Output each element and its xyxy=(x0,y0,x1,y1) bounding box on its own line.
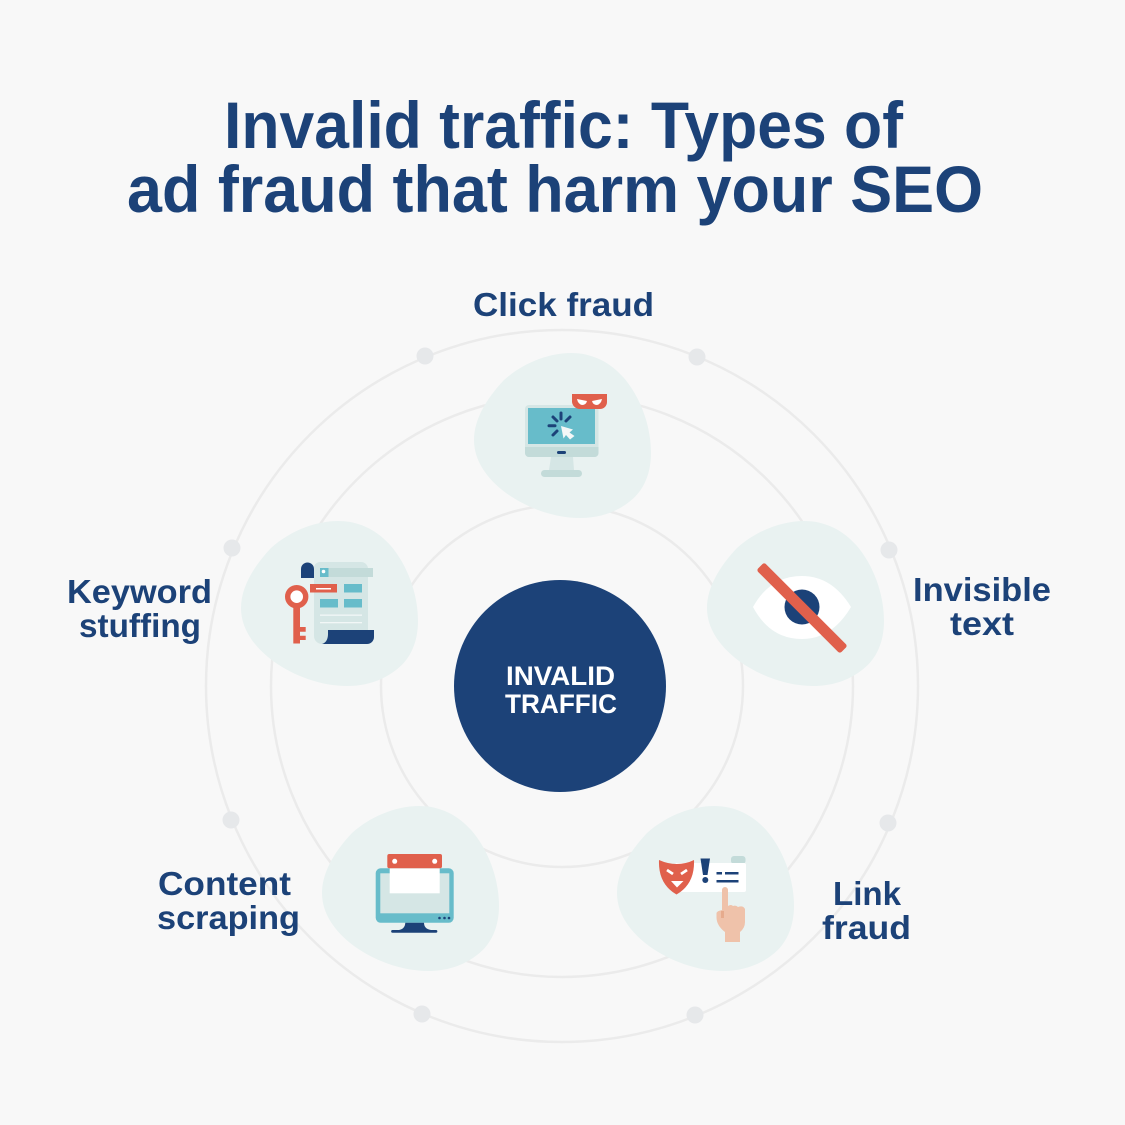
heading: keyword stuffing: stuffing xyxy=(79,607,201,644)
panel: click fraud xyxy=(473,286,654,518)
blob: link fraud xyxy=(617,806,794,971)
title: ad fraud that harm your SEO xyxy=(127,152,983,226)
concentric rings with dots xyxy=(206,330,918,1042)
blob: click fraud xyxy=(474,353,651,518)
blob: content scraping xyxy=(322,806,499,971)
blob: invisible text xyxy=(707,521,884,686)
heading: content scraping: scraping xyxy=(157,899,300,936)
panel: keyword stuffing xyxy=(67,521,418,686)
panel: link fraud xyxy=(617,806,911,971)
icon: mask, alert and pointing hand xyxy=(659,856,746,942)
heading: link fraud: Link xyxy=(833,875,902,912)
heading: invisible text xyxy=(913,571,1051,642)
heading: click fraud: Click fraud xyxy=(473,286,654,323)
centre circle: invalid traffic: TRAFFIC xyxy=(505,689,617,719)
icon: monitor with scraped page xyxy=(376,854,454,933)
icon: monitor with cursor and mask xyxy=(525,394,607,477)
heading: keyword stuffing xyxy=(67,573,212,644)
heading: link fraud: fraud xyxy=(822,909,911,946)
heading: content scraping xyxy=(157,865,300,936)
heading: invisible text: text xyxy=(950,605,1014,642)
heading: content scraping: Content xyxy=(158,865,291,902)
heading: keyword stuffing: Keyword xyxy=(67,573,212,610)
title: Invalid traffic: Types of xyxy=(224,88,904,162)
centre circle: invalid traffic: INVALID xyxy=(506,661,615,691)
blob: keyword stuffing xyxy=(241,521,418,686)
panel: content scraping xyxy=(157,806,499,971)
heading: link fraud xyxy=(822,875,911,946)
icon: document with key xyxy=(288,562,374,644)
title xyxy=(127,88,983,226)
centre circle: invalid traffic xyxy=(454,580,666,792)
icon: crossed-out eye xyxy=(753,562,851,654)
panel: invisible text xyxy=(707,521,1051,686)
heading: invisible text: Invisible xyxy=(913,571,1051,608)
